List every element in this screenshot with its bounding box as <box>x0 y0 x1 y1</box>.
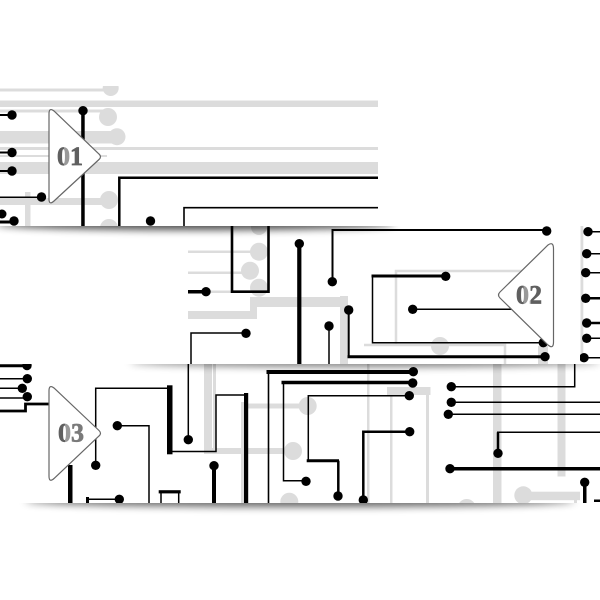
panel: banner 2 <box>188 226 554 364</box>
banner 3 black circuit traces <box>0 361 600 505</box>
arrow badge 03 <box>49 387 100 480</box>
arrow badge 02 <box>498 244 554 347</box>
banner 3 grey circuit background <box>204 364 580 517</box>
shadow under banner 1 <box>0 226 396 236</box>
number 02: 02 <box>516 280 542 309</box>
number 01: 01 <box>57 142 83 171</box>
shadow under banner 3 <box>24 503 576 513</box>
panel: banner 2 right edge traces <box>579 226 600 364</box>
banner 2 black circuit traces <box>188 226 551 365</box>
banner 2 grey circuit background <box>187 219 548 364</box>
panel: banner 1 <box>0 86 378 226</box>
panel: banner 3 <box>0 364 600 503</box>
arrow badge 01 <box>49 110 100 203</box>
banner 1 grey circuit background <box>0 86 378 226</box>
number 03: 03 <box>58 419 84 448</box>
banner 1 black circuit traces <box>0 106 378 226</box>
shadow under banner 2 <box>130 364 600 372</box>
